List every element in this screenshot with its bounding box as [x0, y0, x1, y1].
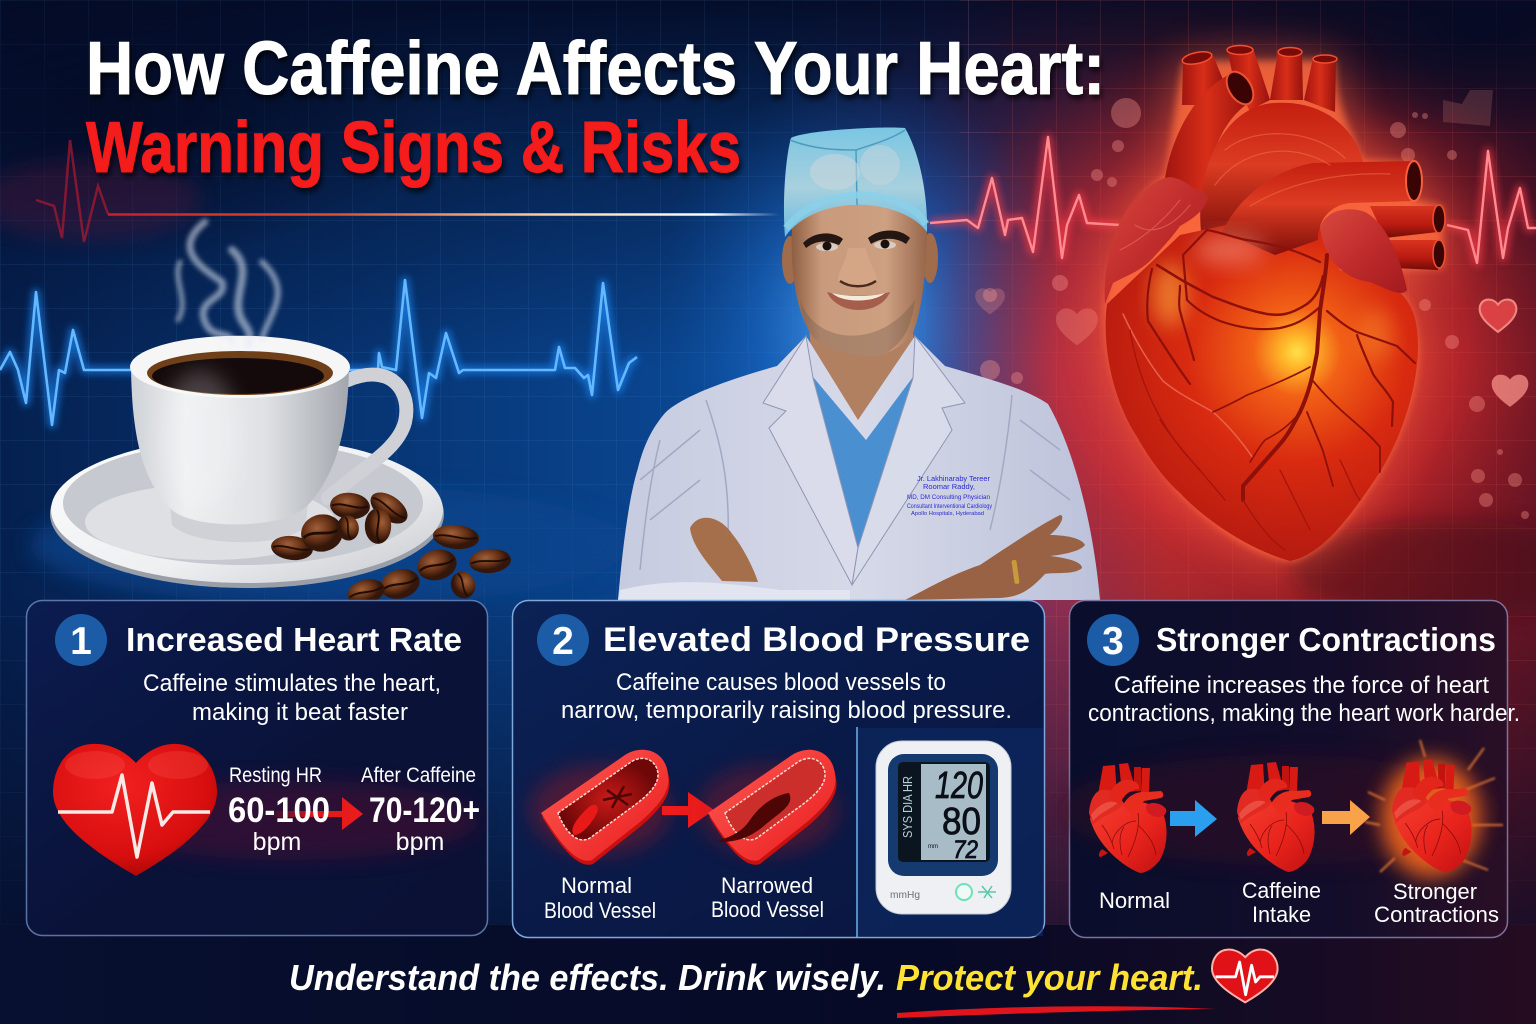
number badge 3: [1087, 614, 1139, 666]
icon: heart after caffeine intake: [1237, 762, 1315, 872]
stat: resting heart rate: bpm: [253, 828, 301, 856]
head: [782, 205, 938, 356]
blood pressure monitor: mmHg: [890, 890, 920, 901]
icon: normal blood vessel: [530, 750, 670, 865]
cup body: [130, 336, 350, 542]
saucer: [50, 437, 444, 588]
number badge 1: [55, 614, 107, 666]
number badge 1: 1: [70, 620, 92, 663]
stat: resting heart rate: Resting HR: [229, 764, 322, 787]
embroidered name on coat: Roomar Raddy,: [923, 484, 975, 491]
description 2: [561, 669, 1012, 724]
stat: after caffeine: 70-120+: [369, 791, 480, 830]
left atrium: [1105, 177, 1208, 304]
highlighted tagline: Protect your heart.: [896, 957, 1203, 998]
description 1: making it beat faster: [192, 699, 408, 726]
blood vessel labels: Blood Vessel: [711, 897, 824, 922]
stat: after caffeine: bpm: [396, 828, 444, 856]
stat: resting heart rate: [228, 764, 330, 856]
title line 2: Warning Signs & Risks: [86, 108, 741, 188]
coffee cup on saucer with beans: [50, 222, 512, 608]
blood pressure monitor: 120: [935, 765, 983, 807]
description 1: [143, 670, 441, 726]
embroidered name on coat: Consultant Interventional Cardiology: [907, 504, 992, 510]
arrow: resting to after caffeine: [270, 797, 363, 830]
description 1: Caffeine stimulates the heart,: [143, 670, 441, 697]
red underline swoosh: [897, 1006, 1216, 1018]
ventricles: [1106, 215, 1418, 561]
description 3: [1088, 672, 1520, 727]
blood pressure monitor: mm: [928, 844, 938, 850]
right side vessels: [1370, 205, 1445, 270]
panel: increased heart rate: [26, 600, 488, 936]
arrow: orange: [1322, 800, 1370, 835]
stat: resting heart rate: 60-100: [228, 791, 330, 830]
anatomical heart: [1105, 46, 1445, 561]
panel: elevated blood pressure: [512, 600, 1044, 938]
blood vessel labels: Normal: [561, 873, 632, 898]
icon: heart with pulse: [53, 744, 217, 876]
pulmonary artery: [1222, 161, 1419, 255]
footer tagline: Understand the effects. Drink wisely.: [289, 957, 886, 998]
aortic arch: [1200, 103, 1364, 240]
footer tagline: [289, 957, 1203, 998]
panel heading 3: Stronger Contractions: [1156, 621, 1496, 658]
neck: [809, 325, 914, 438]
coffee beans: [270, 486, 512, 608]
heart stage labels: Caffeine: [1242, 878, 1321, 903]
title: [86, 26, 1105, 188]
panel: stronger contractions: [1060, 600, 1520, 938]
icon: footer heart with pulse: [1212, 950, 1278, 1002]
floating hearts and bokeh: [975, 90, 1529, 519]
heart stage labels: Stronger: [1393, 879, 1477, 904]
heart stage labels: Intake: [1252, 902, 1311, 927]
cup handle: [328, 375, 406, 498]
blood pressure monitor: 80: [942, 801, 981, 843]
right atrium: [1320, 209, 1407, 293]
blood vessel labels: [544, 873, 824, 923]
embroidered name on coat: Jr. Lakhinaraby Tereer: [917, 474, 990, 483]
icon: normal heart: [1089, 763, 1167, 873]
number badge 2: [537, 614, 589, 666]
blood pressure monitor: 72: [953, 836, 978, 864]
heart highlights and coronary vessels: [1120, 134, 1415, 550]
blood vessel labels: Blood Vessel: [544, 898, 656, 923]
surgical cap: [784, 127, 927, 237]
icon: narrowed blood vessel: [698, 750, 838, 865]
heart stage labels: Normal: [1099, 888, 1170, 913]
blood pressure monitor: SYS DIA HR: [900, 776, 915, 838]
arrow: normal to narrowed: [662, 792, 714, 828]
embroidered name on coat: [907, 474, 992, 517]
red ECG line and divider under title: [36, 140, 780, 242]
arrow: blue: [1170, 800, 1217, 837]
heart stage labels: [1099, 878, 1499, 927]
panel heading 1: Increased Heart Rate: [126, 621, 462, 658]
blood vessel labels: Narrowed: [721, 873, 813, 898]
icon: glowing stronger heart: [1365, 740, 1503, 878]
panel heading 2: Elevated Blood Pressure: [603, 621, 1030, 659]
steam: [178, 222, 278, 345]
embroidered name on coat: MD, DM Consulting Physician: [907, 495, 990, 501]
doctor: [618, 127, 1100, 600]
number badge 2: 2: [552, 620, 574, 663]
heart glow: [1105, 60, 1443, 561]
stat: after caffeine: After Caffeine: [361, 764, 476, 787]
crossed arms and hands: [690, 515, 1085, 600]
heart stage labels: Contractions: [1374, 902, 1499, 927]
blood pressure monitor: [876, 741, 1011, 914]
description 3: Caffeine increases the force of heart: [1114, 672, 1489, 699]
blue ECG line: [0, 280, 637, 425]
stat: after caffeine: [361, 764, 480, 856]
upper vessels: [1165, 46, 1337, 195]
right pink ECG line: [930, 137, 1536, 263]
description 3: contractions, making the heart work harder.: [1088, 700, 1520, 727]
description 2: Caffeine causes blood vessels to: [616, 669, 946, 696]
number badge 3: 3: [1102, 620, 1124, 663]
title line 1: How Caffeine Affects Your Heart:: [86, 26, 1105, 110]
lab coat: [618, 336, 1100, 600]
embroidered name on coat: Apollo Hospitals, Hyderabad: [911, 511, 984, 517]
description 2: narrow, temporarily raising blood pressure.: [561, 697, 1012, 724]
